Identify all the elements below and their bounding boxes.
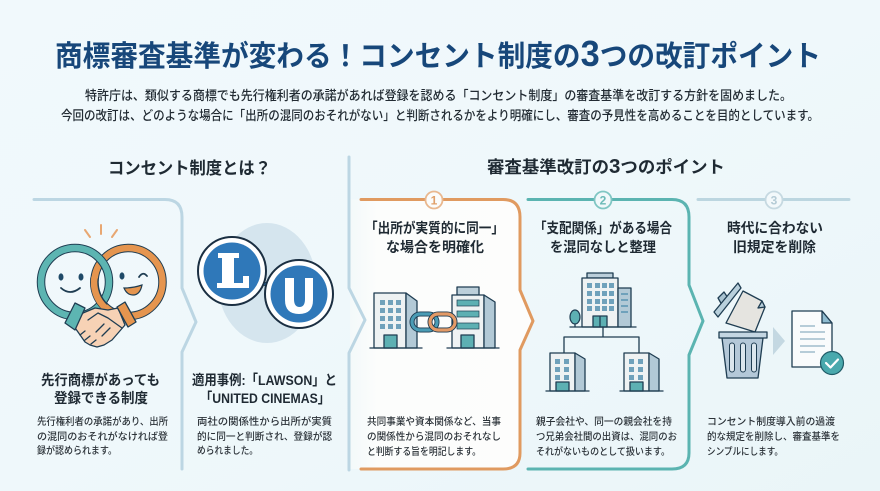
body text: point 1: [367, 415, 501, 458]
body text: example: [197, 415, 332, 457]
heading: point 2: 「支配関係」がある場合: [534, 220, 672, 236]
badge: number 2: 2: [600, 194, 607, 208]
icon: parent company with two subsidiaries: [546, 273, 663, 391]
body text: definition: [37, 415, 168, 457]
panel: consent system definition: [34, 200, 196, 469]
body text: point 3: 的な規定を削除し、審査基準を: [707, 430, 840, 443]
body text: point 2: 親子会社や、同一の親会社を持: [536, 415, 672, 428]
badge: number 1: 1: [431, 194, 438, 208]
panel background: point 1: [350, 200, 533, 469]
badge: number 1: [426, 192, 442, 208]
subheading: example: 「UNITED CINEMAS」: [200, 390, 330, 406]
body text: point 3: [707, 415, 840, 458]
body text: point 1: の関係性から混同のおそれなし: [367, 430, 501, 443]
body text: point 1: と判断する旨を明記します。: [367, 445, 481, 458]
icon: linked L and U circles: [198, 223, 333, 343]
title: 商標審査基準が変わる！コンセント制度の3つの改訂ポイント: [55, 33, 821, 74]
subheading: definition: 先行商標があっても: [41, 372, 160, 388]
body text: definition: 録が認められます。: [37, 444, 117, 457]
heading: point 1: [365, 220, 504, 255]
icon: two smiling rings shaking hands: [41, 225, 162, 347]
panel: point 3: [698, 192, 849, 458]
body text: example: 的に同一と判断され、登録が認: [197, 430, 332, 443]
body text: point 2: それがないものとして扱います。: [536, 445, 670, 458]
intro text: [61, 88, 819, 123]
heading: three revision points: 審査基準改訂の3つのポイント: [487, 156, 725, 178]
badge: number 3: [766, 192, 782, 208]
subheading: example: [192, 372, 337, 406]
heading: point 1: な場合を明確化: [386, 239, 484, 255]
body text: definition: の混同のおそれがなければ登: [37, 430, 168, 443]
body text: example: められました。: [197, 445, 258, 457]
panel: application example: [192, 157, 365, 470]
panel: point 2: [528, 192, 703, 469]
body text: point 2: [536, 415, 677, 458]
body text: point 2: つ兄弟会社間の出資は、混同のお: [536, 430, 677, 443]
intro text: 特許庁は、類似する商標でも先行権利者の承諾があれば登録を認める「コンセント制度」の審査基準を改訂する方針を固めました。: [85, 88, 792, 103]
body text: point 1: 共同事業や資本関係など、当事: [367, 415, 501, 428]
icon: two buildings joined by chain: [370, 287, 499, 348]
subheading: definition: [41, 372, 160, 406]
heading: point 2: を混同なしと整理: [550, 239, 656, 255]
heading: point 3: [727, 220, 823, 255]
badge: number 3: 3: [771, 194, 778, 208]
heading: point 3: 旧規定を削除: [733, 239, 816, 255]
body text: point 3: シンプルにします。: [707, 446, 783, 458]
heading: point 3: 時代に合わない: [727, 220, 823, 236]
heading: point 1: 「出所が実質的に同一」: [365, 220, 504, 236]
body text: definition: 先行権利者の承諾があり、出所: [37, 415, 168, 428]
badge: number 2: [594, 192, 612, 208]
body text: example: 両社の関係性から出所が実質: [197, 415, 332, 428]
subheading: definition: 登録できる制度: [54, 390, 148, 406]
body text: point 3: コンセント制度導入前の過渡: [707, 415, 835, 428]
heading: point 2: [534, 220, 672, 255]
icon: old rule into trash bin: [714, 283, 844, 378]
heading: consent system: コンセント制度とは？: [108, 159, 271, 178]
subheading: example: 適用事例:「LAWSON」と: [192, 372, 337, 388]
panel: point 1: [361, 192, 533, 469]
